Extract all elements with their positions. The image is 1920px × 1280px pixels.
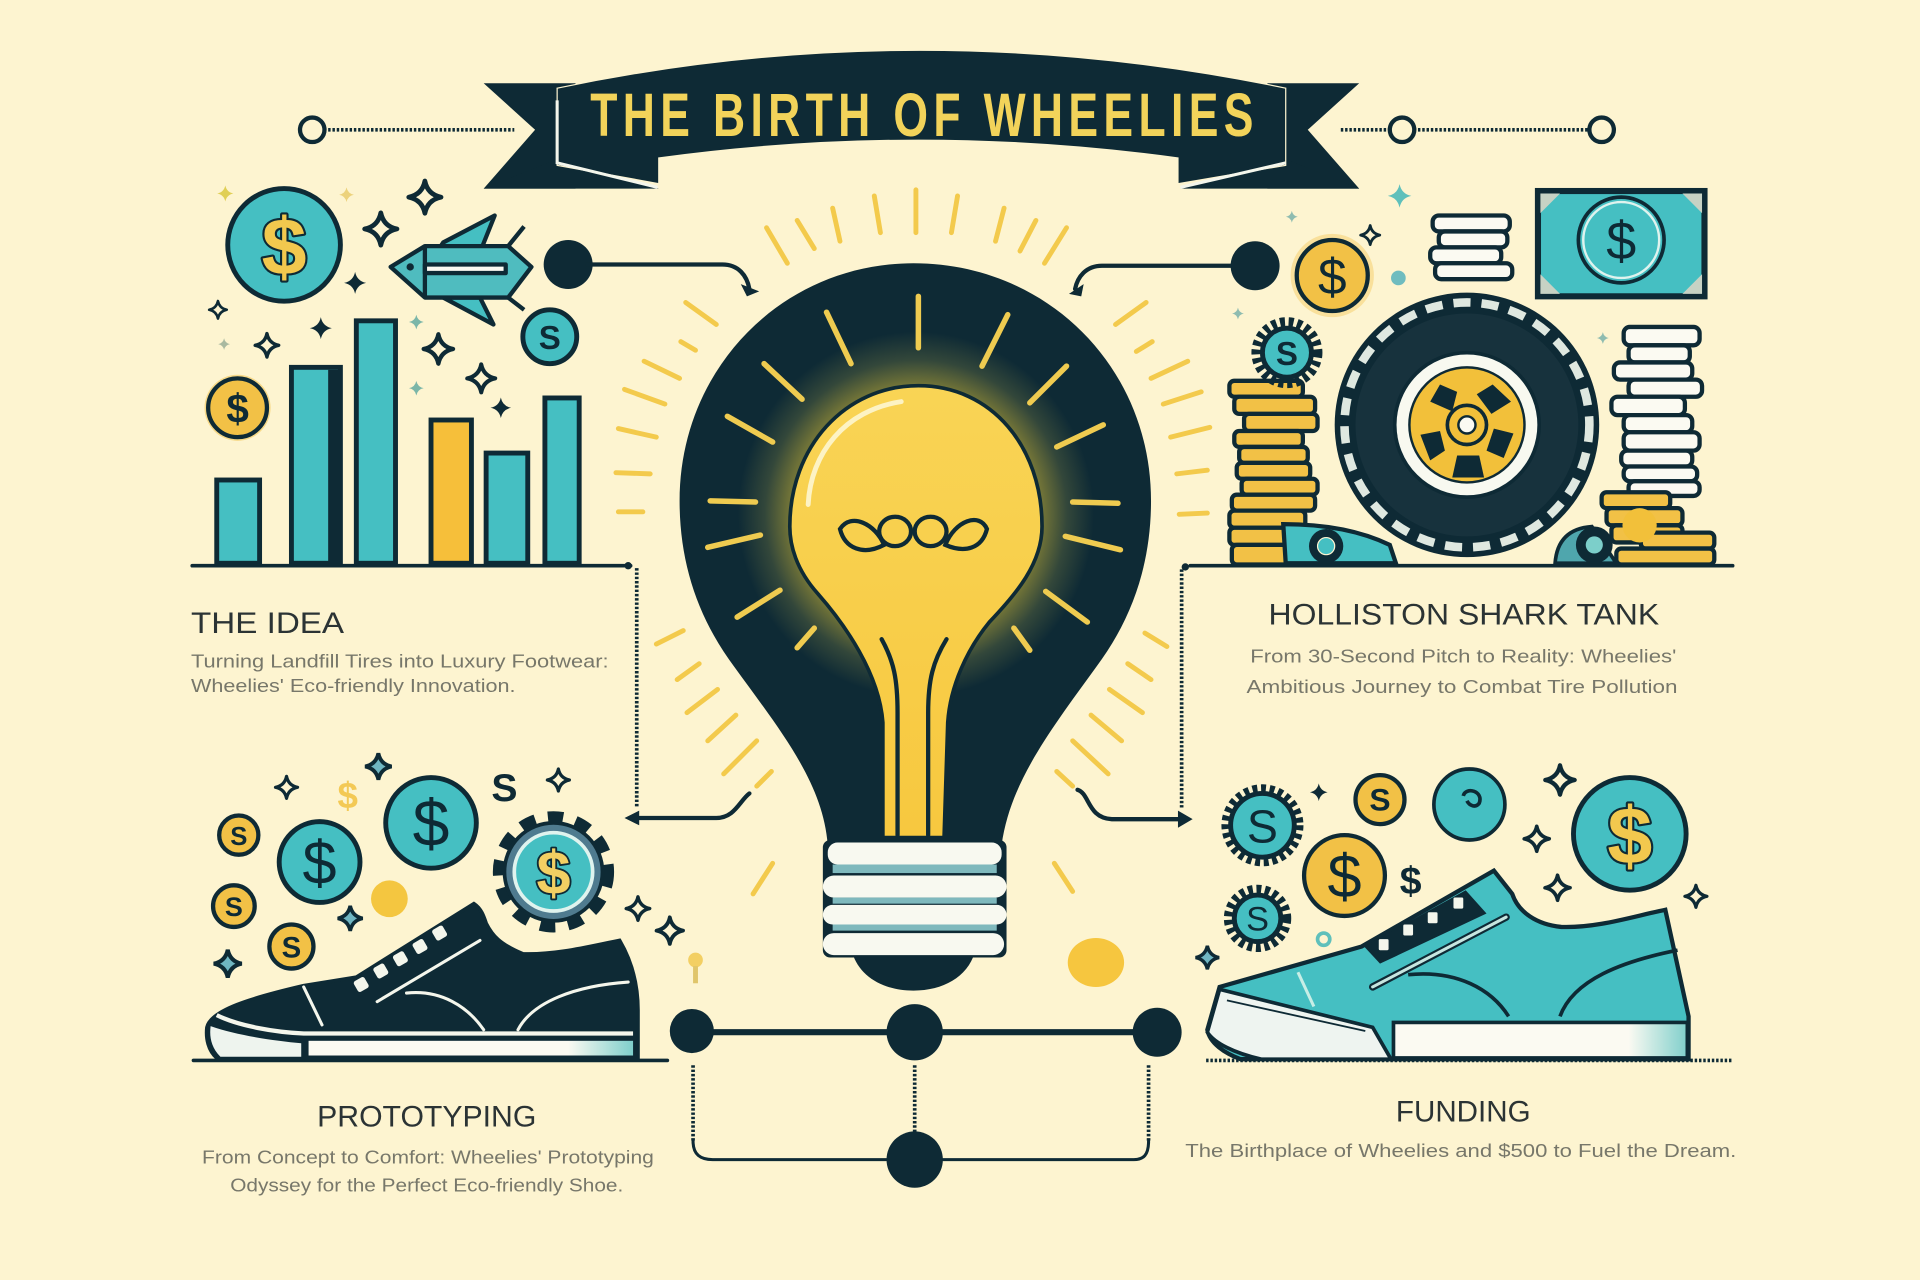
screw base bbox=[823, 840, 1007, 958]
icon: small cars bbox=[1283, 508, 1657, 563]
icon: large teal coin bbox=[1573, 778, 1686, 890]
title text: THE BIRTH OF WHEELIES bbox=[590, 81, 1259, 149]
icon: white coin stack top bbox=[1430, 216, 1512, 279]
shelf line bbox=[1190, 564, 1733, 567]
icon: teal plain coin bbox=[1434, 769, 1505, 840]
connector: shark tank to bulb bbox=[1069, 241, 1280, 296]
left title ornament bbox=[300, 118, 514, 142]
connector: funding arrow bbox=[1078, 563, 1193, 828]
heading: funding: FUNDING bbox=[1396, 1096, 1531, 1129]
icon: navy shoe bbox=[207, 904, 638, 1058]
bulb base bottom bbox=[852, 953, 975, 991]
icon: yellow coin bbox=[204, 375, 271, 441]
icon: yellow coins: S bbox=[1369, 782, 1391, 818]
icon: large teal dollar coin bbox=[228, 189, 340, 301]
icon: yellow coins: S bbox=[225, 892, 243, 922]
icon: yellow coins: $ bbox=[1400, 860, 1422, 903]
text: shark tank description: From 30-Second Pitch to Reality: Wheelies' bbox=[1250, 645, 1676, 666]
icon: rocket bbox=[391, 216, 531, 324]
inner yellow bulb bbox=[790, 386, 1042, 838]
panel: funding bbox=[1185, 765, 1736, 1161]
icon: yellow coin: $ bbox=[226, 385, 249, 431]
icon: yellow coin stack right bbox=[1602, 492, 1714, 564]
filament bbox=[840, 517, 987, 550]
icon: gear coins bbox=[1226, 789, 1299, 948]
icon: white coin stack right bbox=[1611, 327, 1702, 496]
icon: teal dollar coins bbox=[279, 767, 518, 902]
icon: sparkles bbox=[1196, 765, 1707, 969]
icon: gear coins: S bbox=[1247, 800, 1278, 852]
icon: gear coin bbox=[1256, 322, 1318, 383]
connector: idea to bulb bbox=[544, 240, 759, 296]
icon: yellow coins: S bbox=[230, 823, 247, 851]
bar chart bbox=[217, 321, 579, 563]
icon: large teal coin: $ bbox=[1607, 791, 1652, 881]
bulb highlight bbox=[808, 402, 901, 504]
title banner bbox=[484, 50, 1359, 189]
bulb outer dark glass bbox=[680, 263, 1151, 845]
icon: teal dollar coins: $ bbox=[303, 829, 337, 897]
icon: yellow coin stack left bbox=[1229, 381, 1318, 564]
icon: yellow coin: $ bbox=[1318, 247, 1347, 305]
icon: yellow coin blob bbox=[1068, 938, 1124, 987]
icon: large teal dollar coin: $ bbox=[262, 202, 307, 292]
panel: holliston shark tank bbox=[1190, 184, 1733, 697]
icon: teal dollar coins: $ bbox=[413, 787, 449, 861]
panel: prototyping bbox=[193, 753, 703, 1195]
icon: tiny bulb bbox=[688, 953, 703, 983]
connector: prototyping arrow bbox=[624, 562, 749, 825]
shelf line bbox=[192, 564, 631, 567]
icon: yellow coins bbox=[213, 775, 408, 969]
stem wires bbox=[882, 639, 947, 835]
heading: prototyping: PROTOTYPING bbox=[317, 1101, 536, 1134]
icon: dollar bill bbox=[1538, 191, 1704, 296]
icon: yellow coins: $ bbox=[338, 775, 358, 816]
text: shark tank description: Ambitious Journey to Combat Tire Pollution bbox=[1247, 676, 1678, 697]
inner rays bbox=[708, 296, 1120, 650]
icon: decorative dots bbox=[1232, 184, 1609, 344]
panel: the idea bbox=[191, 181, 631, 696]
icon: gear coins: S bbox=[1246, 901, 1269, 939]
text: prototyping description: From Concept to Comfort: Wheelies' Prototyping bbox=[202, 1146, 654, 1167]
right title ornament bbox=[1341, 118, 1614, 142]
light bulb rays bbox=[616, 190, 1210, 894]
icon: yellow coins: $ bbox=[1327, 843, 1362, 911]
icon: yellow coin bbox=[1291, 234, 1374, 317]
shelf line bbox=[1206, 1059, 1733, 1062]
icon: teal shoe bbox=[1207, 871, 1689, 1059]
heading: holliston shark tank: HOLLISTON SHARK TANK bbox=[1269, 598, 1660, 631]
network diagram at bottom bbox=[670, 1004, 1182, 1188]
icon: gear coin: $ bbox=[536, 839, 571, 907]
icon: sparkles bbox=[209, 181, 511, 418]
icon: yellow coins: S bbox=[282, 932, 301, 965]
bulb glow bbox=[722, 316, 1109, 713]
icon: small teal coin: S bbox=[539, 320, 561, 357]
icon: teal dollar coins: S bbox=[491, 767, 518, 810]
text: prototyping description: Odyssey for the Perfect Eco-friendly Shoe. bbox=[230, 1174, 623, 1195]
heading: the idea: THE IDEA bbox=[191, 607, 345, 640]
icon: sparkles bbox=[214, 753, 683, 978]
text: the idea description: Wheelies' Eco-friendly Innovation. bbox=[191, 675, 516, 696]
icon: small teal coin bbox=[523, 310, 577, 364]
icon: dollar bill: $ bbox=[1606, 212, 1636, 272]
text: the idea description: Turning Landfill Tires into Luxury Footwear: bbox=[191, 650, 609, 671]
icon: gear coin: S bbox=[1276, 336, 1298, 373]
icon: gear coin bbox=[501, 819, 606, 924]
light bulb bbox=[680, 263, 1151, 991]
icon: tire bbox=[1335, 293, 1599, 557]
shelf line bbox=[193, 1059, 667, 1062]
icon: yellow coins bbox=[1304, 775, 1422, 916]
text: funding description: The Birthplace of Wheelies and $500 to Fuel the Dream. bbox=[1185, 1140, 1736, 1161]
